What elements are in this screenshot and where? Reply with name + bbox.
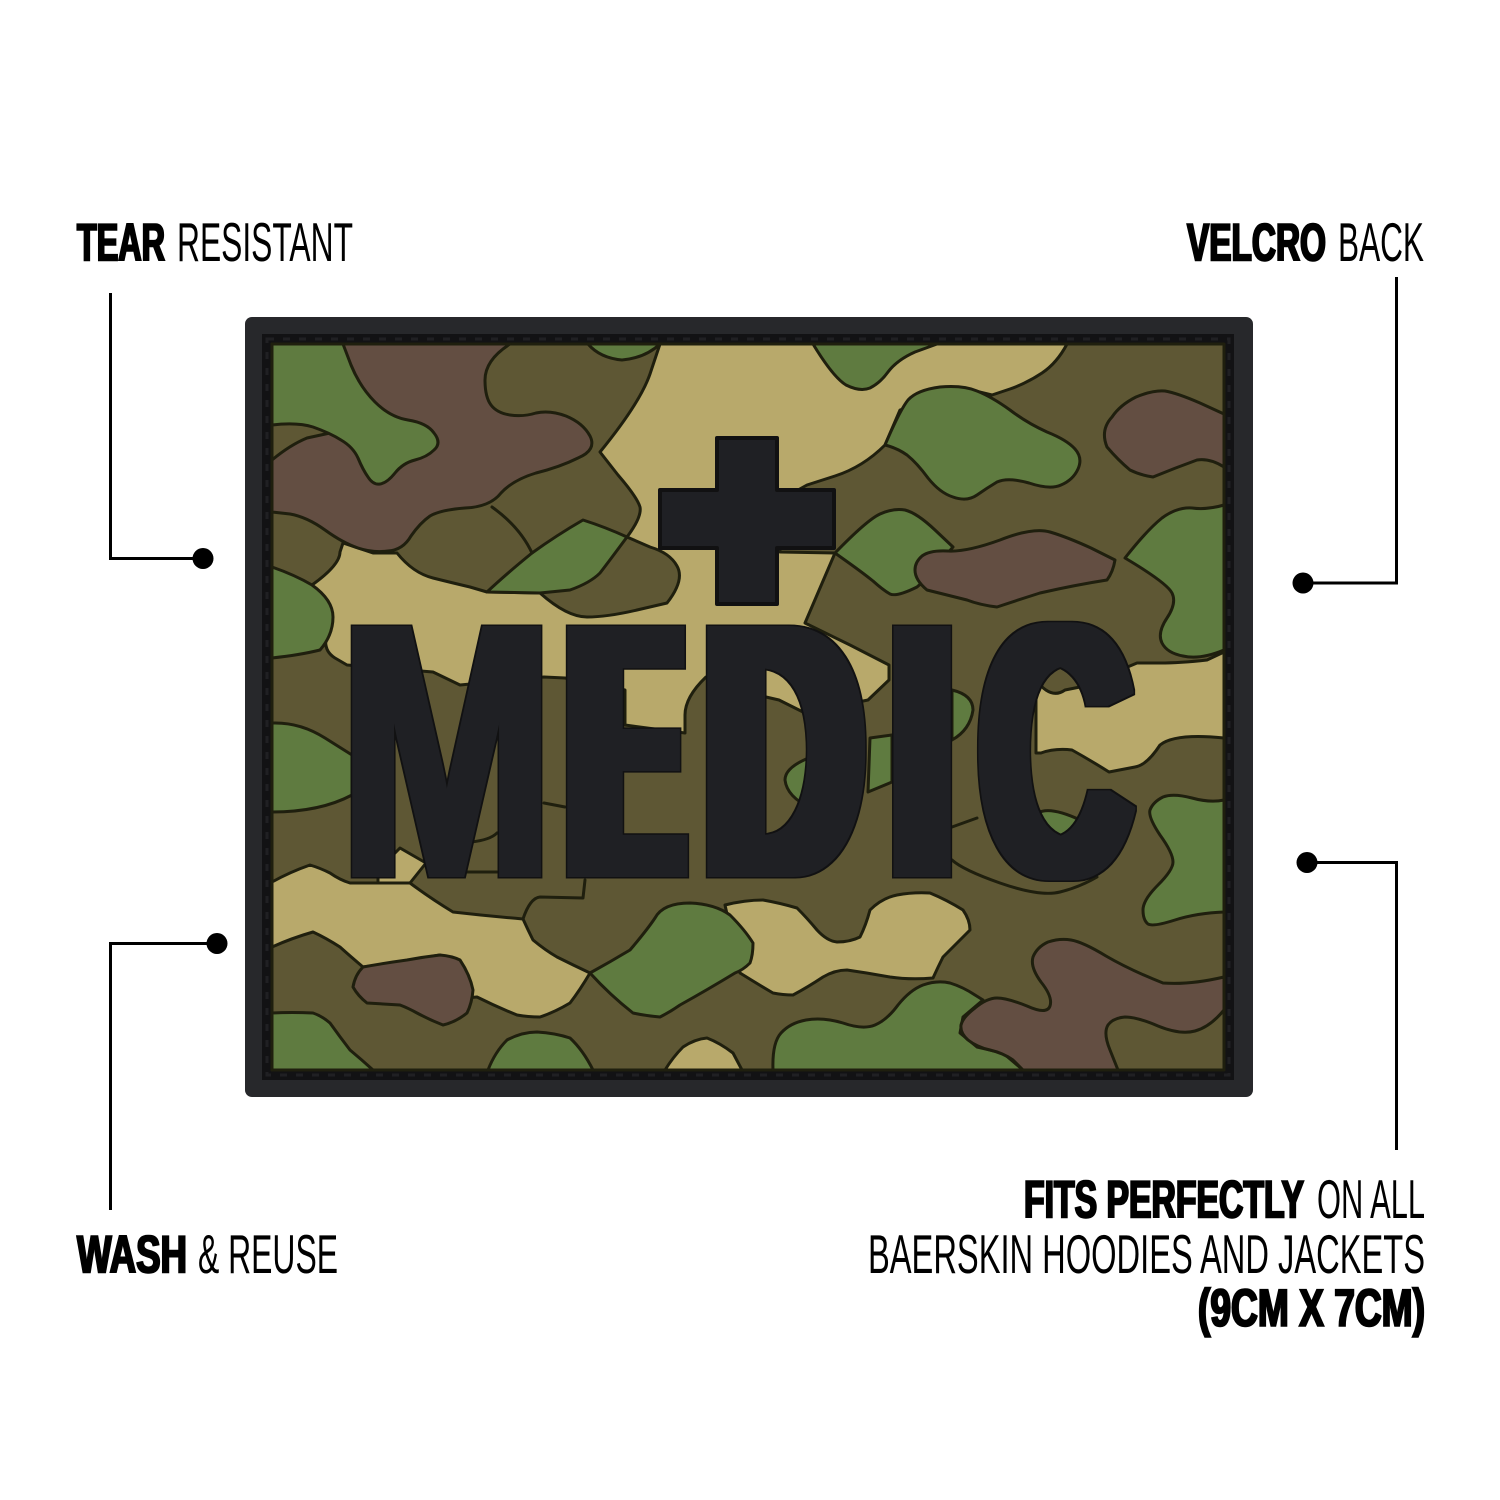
arrow: velcro leader line (1292, 277, 1396, 594)
callout: wash and reuse (77, 933, 338, 1285)
callout: tear resistant (77, 211, 353, 569)
patch title: MEDIC: D (706, 548, 861, 953)
panel: medic camo patch (245, 317, 1253, 1097)
text: back: BACK (1338, 211, 1424, 273)
patch title: MEDIC: E (573, 550, 677, 954)
arrow: wash leader line (110, 933, 228, 1210)
patch title: MEDIC (340, 548, 1131, 954)
text: resistant: RESISTANT (177, 211, 353, 273)
patch title: MEDIC: I (872, 548, 972, 953)
arrow: fits leader line (1296, 852, 1396, 1150)
icon: medical cross (660, 438, 834, 604)
heading: fits perfectly: FITS PERFECTLY (1024, 1170, 1304, 1230)
patch title: MEDIC: M (340, 549, 554, 953)
patch title: MEDIC: C (980, 549, 1131, 953)
stitched channel (262, 334, 1234, 1080)
heading: velcro: VELCRO (1187, 214, 1326, 272)
callout: fits perfectly (868, 852, 1425, 1338)
heading: wash: WASH (77, 1226, 187, 1284)
text: and reuse: & REUSE (198, 1223, 338, 1285)
heading: tear resistant: TEAR (77, 214, 165, 272)
callout: velcro back (1187, 211, 1424, 594)
camouflage outline details (430, 507, 1097, 919)
patch rubber border (245, 317, 1253, 1097)
arrow: tear leader line (110, 293, 214, 569)
camouflage field (272, 344, 1224, 1070)
